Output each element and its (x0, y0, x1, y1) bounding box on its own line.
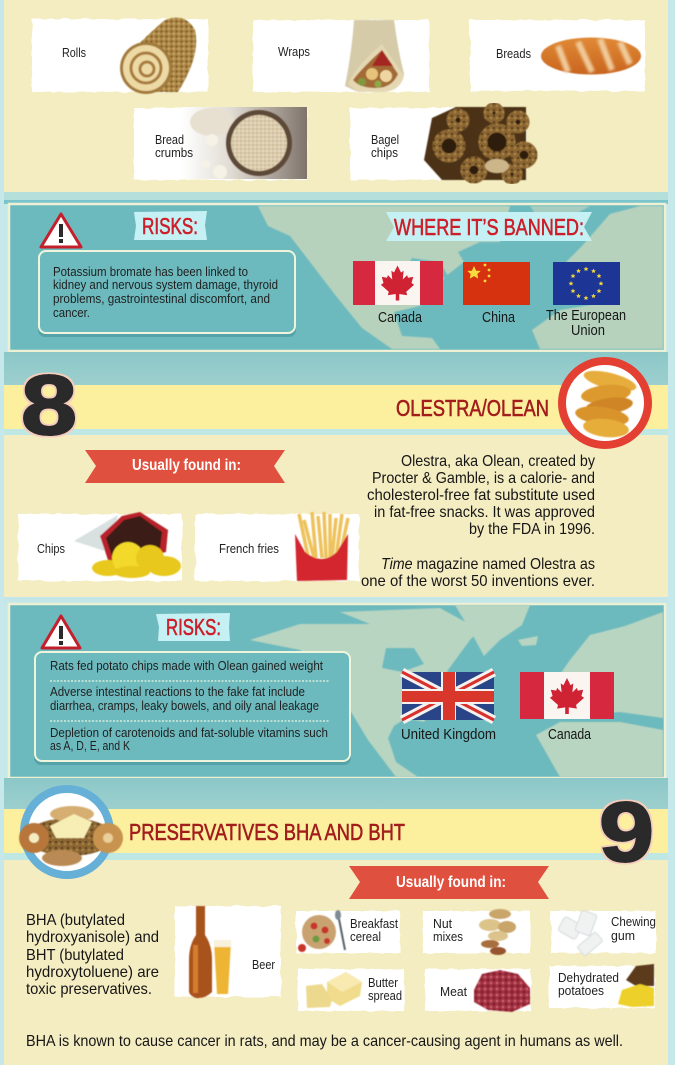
text: olestra description: Time magazine named Olestra as (381, 556, 595, 573)
card: rolls (32, 18, 208, 94)
card: butter spread (298, 969, 404, 1011)
card: breakfast cereal: Breakfast (350, 916, 398, 931)
panel: bromate foods (4, 0, 668, 192)
icon: chip stack badge (562, 361, 648, 445)
card: breads: Breads (496, 46, 531, 61)
panel: preservatives body background (4, 860, 668, 1065)
world map (250, 605, 663, 777)
card: nut mixes: Nut (433, 916, 452, 931)
card: chewing gum: gum (611, 928, 635, 943)
section 8 header band (4, 352, 668, 436)
section 9 header band (4, 778, 668, 861)
panel: olestra body background (4, 435, 668, 597)
card: bread crumbs (134, 107, 307, 180)
card: bread crumbs: crumbs (155, 145, 193, 160)
text: preservatives description: toxic preservatives. (26, 981, 152, 998)
text: preservatives description (26, 912, 159, 998)
text: olestra description (361, 453, 595, 590)
card: french fries: French fries (219, 541, 279, 556)
card: chips: Chips (37, 541, 65, 556)
card: bagel chips: chips (371, 145, 398, 160)
card: french fries (195, 512, 359, 581)
card: dehydrated potatoes: Dehydrated (558, 970, 619, 985)
card: chewing gum (551, 910, 656, 956)
world map (258, 206, 663, 349)
flag: Canada: Canada (378, 309, 423, 326)
flag: Canada (353, 261, 443, 326)
callout: risks text: kidney and nervous system damage, thyroid (53, 277, 278, 292)
callout: risks text (38, 251, 296, 337)
flag: Canada (520, 672, 614, 743)
card: butter spread: Butter (368, 975, 399, 990)
card: bagel chips (350, 107, 533, 180)
flag: Canada: Canada (548, 726, 592, 743)
callout: risks list: as A, D, E, and K (50, 738, 130, 753)
card: bread crumbs: Bread (155, 132, 184, 147)
panel: risks and bans (4, 192, 668, 351)
text: preservatives description: BHA (butylated (26, 912, 125, 929)
flag: European Union: Union (571, 322, 605, 339)
card: breakfast cereal (296, 910, 400, 953)
text: preservatives description: hydroxytoluene) are (26, 964, 159, 981)
heading: olestra: OLESTRA/OLEAN (396, 395, 549, 421)
callout: risks list: diarrhea, cramps, leaky bowels, and oily anal leakage (50, 698, 319, 713)
text: olestra description: one of the worst 50 inventions ever. (361, 573, 595, 590)
callout: risks text: Potassium bromate has been linked to (53, 264, 248, 279)
heading: risks: RISKS: (142, 213, 198, 239)
heading: risks: RISKS: (166, 614, 221, 640)
card: breakfast cereal: cereal (350, 929, 381, 944)
heading: preservatives: PRESERVATIVES BHA AND BHT (129, 819, 405, 845)
icon: snack badge (19, 789, 123, 875)
text: olestra description: cholesterol-free fat substitute used (367, 487, 595, 504)
card: rolls: Rolls (62, 45, 86, 60)
callout: risks text: cancer. (53, 305, 90, 320)
card: nut mixes (423, 909, 530, 955)
card: breads (470, 20, 645, 91)
card: bagel chips: Bagel (371, 132, 399, 147)
card: wraps (253, 20, 429, 92)
text: preservatives description: BHT (butylated (26, 947, 124, 964)
number 8: 8 (21, 358, 77, 452)
card: chewing gum: Chewing (611, 914, 656, 929)
text: olestra description: Olestra, aka Olean, created by (401, 453, 595, 470)
flag: United Kingdom (401, 672, 496, 743)
card: dehydrated potatoes (549, 964, 655, 1008)
card: meat: Meat (440, 984, 467, 999)
card: beer (175, 906, 281, 998)
card: meat (425, 969, 531, 1012)
flag: China: China (482, 309, 516, 326)
flag: United Kingdom: United Kingdom (401, 726, 496, 743)
ribbon: usually found in: Usually found in: (396, 874, 506, 891)
warning icon (42, 616, 80, 648)
text: olestra description: by the FDA in 1996. (469, 521, 595, 538)
card: nut mixes: mixes (433, 929, 463, 944)
flag: European Union (546, 262, 626, 339)
warning icon (41, 214, 81, 247)
callout: risks list: Depletion of carotenoids and fat-soluble vitamins such (50, 725, 328, 740)
callout: risks list: Adverse intestinal reactions to the fake fat include (50, 684, 305, 699)
flag: China (463, 262, 530, 326)
ribbon: usually found in (349, 866, 549, 899)
number 9: 9 (599, 785, 654, 879)
ribbon: usually found in (85, 450, 285, 483)
text: BHA warning: BHA is known to cause cancer in rats, and may be a cancer-causing agent in humans as well. (26, 1033, 623, 1050)
panel: olestra risks (4, 597, 668, 778)
card: beer: Beer (252, 957, 276, 972)
flag: European Union: The European (546, 307, 626, 324)
card: dehydrated potatoes: potatoes (558, 983, 604, 998)
callout: risks list (34, 652, 351, 765)
card: wraps: Wraps (278, 44, 310, 59)
text: olestra description: Procter & Gamble, is a calorie- and (372, 470, 595, 487)
card: butter spread: spread (368, 988, 402, 1003)
text: olestra description: in fat-free snacks. It was approved (374, 504, 595, 521)
ribbon: usually found in: Usually found in: (132, 457, 241, 474)
card: chips (18, 512, 182, 581)
heading: where it's banned: WHERE IT’S BANNED: (394, 214, 584, 240)
text: preservatives description: hydroxyanisole) and (26, 929, 159, 946)
callout: risks list: Rats fed potato chips made with Olean gained weight (50, 658, 323, 673)
callout: risks text: problems, gastrointestinal discomfort, and (53, 291, 270, 306)
